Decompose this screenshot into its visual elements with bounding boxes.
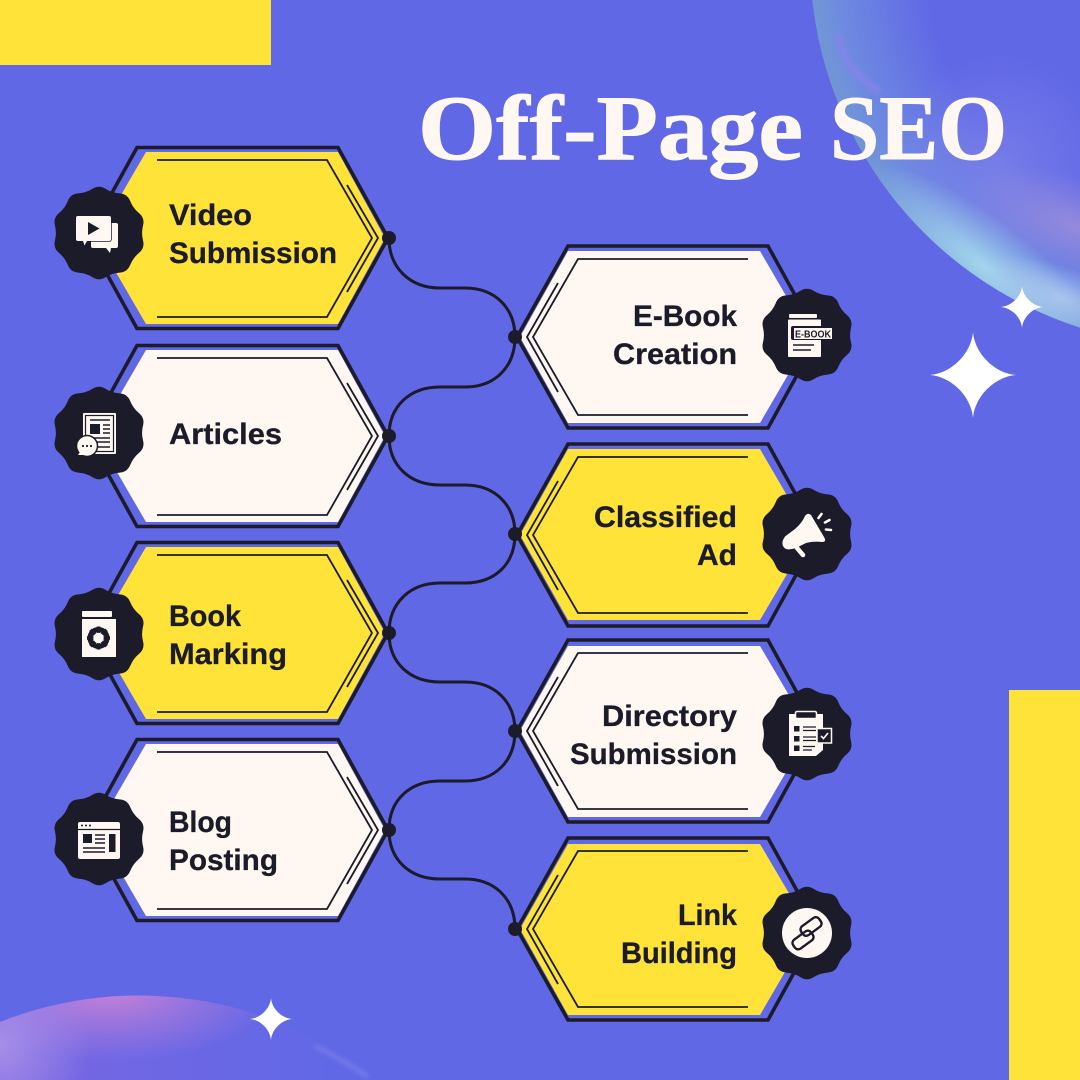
label: Articles: [169, 418, 282, 451]
panel: E-Book Creation: [517, 246, 852, 428]
panel: Directory Submission: [517, 640, 852, 822]
label: Video: [169, 199, 252, 232]
label: Building: [621, 937, 737, 970]
title: SEO: [830, 77, 1007, 179]
hexagon fill: [520, 646, 810, 817]
hexagon outline: [517, 838, 818, 1020]
label: Directory: [602, 700, 737, 733]
label: Ad: [697, 539, 737, 572]
panel: Articles: [54, 346, 388, 526]
label: Submission: [570, 738, 737, 771]
label: [594, 501, 737, 572]
title: [418, 77, 1007, 179]
label: Book: [169, 600, 241, 633]
decorative bubble: bottom left: [0, 995, 377, 1080]
label: Posting: [169, 844, 278, 877]
panel: Book Marking: [54, 542, 388, 724]
connector line between steps: [382, 231, 522, 936]
hexagon outline: [87, 740, 388, 920]
label: [613, 300, 737, 371]
decorative bubble: top right: [812, 0, 1080, 328]
hexagon outline: [87, 346, 388, 526]
hexagon fill: [520, 844, 810, 1015]
label: Marking: [169, 638, 287, 671]
badge with settings book icon: [54, 588, 144, 680]
hexagon fill: [96, 152, 385, 324]
sparkle: top right small: [1001, 286, 1043, 328]
hexagon outline: [87, 542, 388, 724]
label: Classified: [594, 501, 737, 534]
badge with e-book icon: E-BOOK: [795, 328, 831, 340]
label: Blog: [169, 806, 232, 839]
hexagon fill: [520, 251, 810, 423]
label: [169, 806, 278, 877]
label: [169, 199, 337, 270]
hexagon fill: [96, 744, 385, 916]
hexagon outline: [517, 444, 818, 626]
yellow block: top left: [0, 0, 271, 65]
label: [169, 600, 287, 671]
sparkle: bottom: [250, 998, 292, 1040]
label: E-Book: [633, 300, 737, 333]
panel: Video Submission: [54, 148, 388, 328]
label: Link: [678, 899, 737, 932]
sparkle: large: [930, 332, 1016, 418]
hexagon outline: [517, 246, 818, 428]
hexagon fill: [96, 350, 385, 522]
hexagon fill: [520, 449, 810, 620]
yellow block: right edge: [1009, 690, 1080, 1080]
label: [570, 700, 737, 771]
title: Off-Page: [418, 77, 803, 179]
label: [621, 899, 737, 970]
hexagon outline: [87, 148, 388, 328]
panel: Classified Ad: [517, 444, 852, 626]
badge with chain link icon: [762, 887, 852, 979]
badge with news icon: [54, 387, 144, 479]
panel: Blog Posting: [54, 740, 388, 920]
hexagon outline: [517, 640, 818, 822]
panel: Link Building: [517, 838, 852, 1020]
badge with e-book icon: [762, 289, 852, 381]
badge with video chat icon: [54, 187, 144, 279]
badge with checklist icon: [762, 688, 852, 780]
label: Submission: [169, 237, 337, 270]
badge with megaphone icon: [762, 488, 852, 580]
badge with browser icon: [54, 793, 144, 885]
hexagon fill: [96, 547, 385, 719]
label: Creation: [613, 338, 737, 371]
